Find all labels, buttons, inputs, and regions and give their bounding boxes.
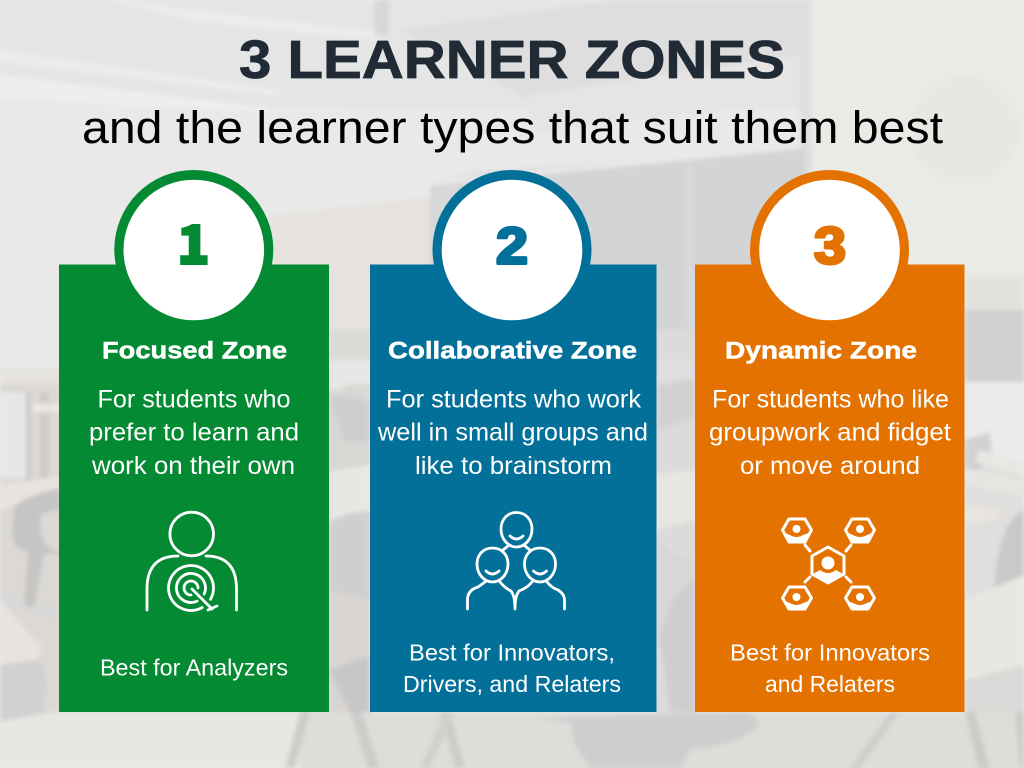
icon: group of three people [468,512,564,609]
left floor and desks [0,370,330,768]
map [812,0,1024,280]
cork board [270,197,430,375]
best for: Best for Analyzers [100,654,288,680]
best for: and Relaters [765,671,895,697]
description: prefer to learn and [89,418,299,446]
best for: Best for Innovators [730,640,930,666]
description: For students who [98,386,290,414]
heading: Collaborative Zone [388,338,637,364]
number badge 2: 2 [496,218,528,276]
ceiling [0,0,1024,110]
description [89,386,299,480]
best for [730,640,930,697]
heading: Focused Zone [102,338,287,364]
right side desks [965,467,1024,712]
icon: person with target [147,512,236,611]
best for: Best for Innovators, [409,640,615,666]
description: well in small groups and [377,418,648,446]
between panel 2 and 3 [656,330,696,712]
lower right board [965,310,1024,382]
bottom floor [300,712,1024,768]
panel: focused zone [59,170,329,712]
title: 3 LEARNER ZONES [239,30,785,90]
panel: dynamic zone [695,170,964,712]
icon: connected network of people [782,519,874,609]
description: or move around [740,452,920,480]
description [709,386,951,480]
between panel 1 and 2 [329,330,370,712]
description: groupwork and fidget [709,418,951,446]
subtitle: and the learner types that suit them best [82,102,944,153]
description: like to brainstorm [415,452,612,480]
number badge 2 [432,170,592,329]
number badge 1: 1 [177,201,210,280]
description: For students who work [386,386,641,414]
panel: collaborative zone [370,170,656,712]
best for [403,640,621,697]
description [377,386,648,480]
number badge 1 [114,170,273,329]
number badge 3: 3 [814,218,846,276]
best for: Drivers, and Relaters [403,671,621,697]
description: For students who like [712,386,949,414]
number badge 3 [750,170,909,329]
blackboard [480,148,805,375]
description: work on their own [91,452,295,480]
heading: Dynamic Zone [725,338,917,364]
